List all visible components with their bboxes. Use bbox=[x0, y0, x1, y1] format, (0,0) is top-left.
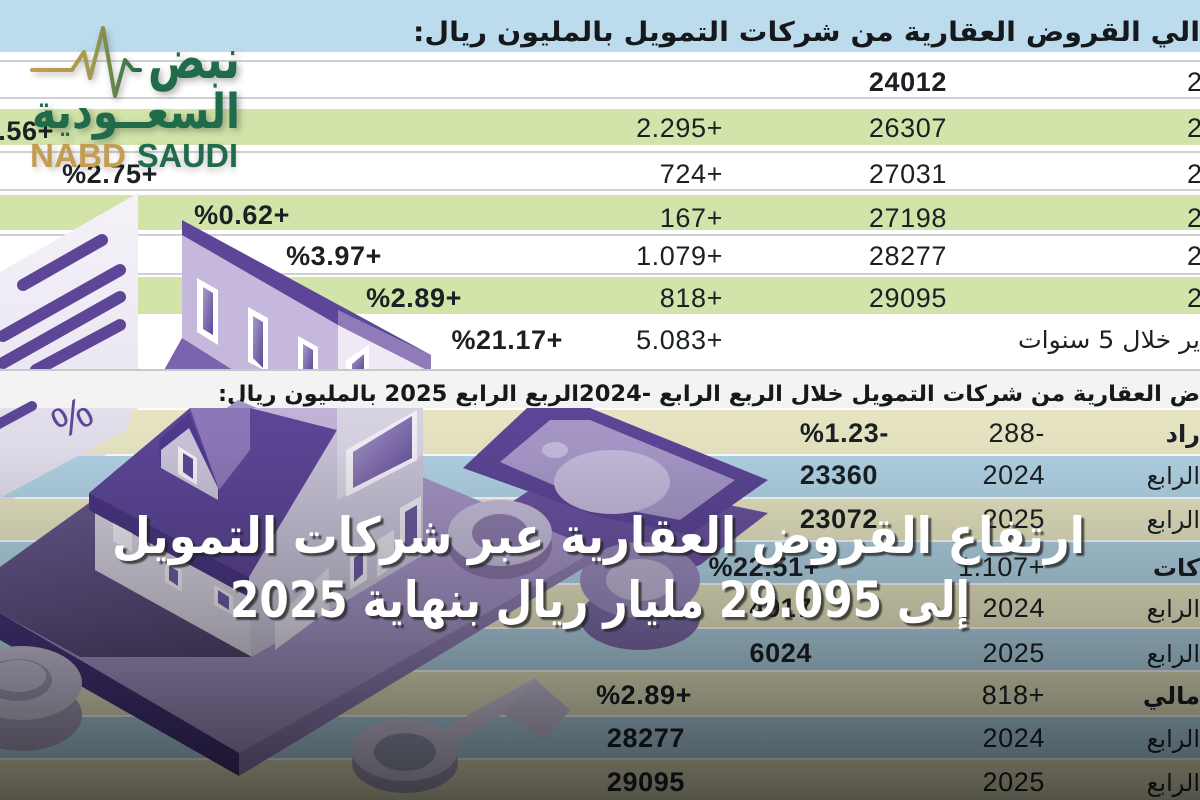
top table values: 2.295+ bbox=[636, 113, 723, 143]
second table values: 2024 bbox=[983, 723, 1045, 753]
second table values: مالي bbox=[1143, 682, 1200, 710]
second table values: 288- bbox=[989, 418, 1045, 448]
top table values: 29095 bbox=[869, 283, 947, 313]
illustration: coin ring bbox=[448, 500, 552, 579]
top table values: ير خلال 5 سنوات bbox=[1018, 326, 1200, 354]
illustration: ground plate bbox=[0, 400, 597, 776]
top table values: 818+ bbox=[660, 283, 723, 313]
title shadow: ارتفاع القروض العقارية عبر شركات التمويل bbox=[115, 510, 1088, 569]
title shadow bbox=[115, 510, 1088, 633]
top table values: 167+ bbox=[660, 203, 723, 233]
house left wall bbox=[95, 513, 252, 657]
second table values: 1.107+ bbox=[958, 552, 1045, 582]
top table values: %0.62+ bbox=[194, 200, 290, 230]
top table heading band bbox=[0, 0, 1200, 52]
top table values: %2.89+ bbox=[366, 283, 462, 313]
illustration: coin stack right bbox=[580, 542, 700, 650]
second table heading: ض العقارية من شركات التمويل خلال الربع الرابع -2024الربع الرابع 2025 بالمليون ريال: bbox=[218, 382, 1200, 407]
second table values: الرابع bbox=[1147, 595, 1200, 623]
second table values: الرابع bbox=[1147, 506, 1200, 534]
logo shadow: نبض bbox=[151, 30, 243, 95]
second table values: الرابع bbox=[1147, 640, 1200, 668]
illustration: house bbox=[89, 408, 423, 657]
logo shadow: السعــودية bbox=[35, 87, 243, 143]
second table values: %2.89+ bbox=[596, 680, 692, 710]
second table values: 29095 bbox=[607, 767, 685, 797]
logo heartbeat line bbox=[32, 28, 140, 96]
top table values: %3.97+ bbox=[286, 241, 382, 271]
top table values: %21.17+ bbox=[451, 325, 563, 355]
second table values: 2025 bbox=[983, 638, 1045, 668]
top table values: 27198 bbox=[869, 203, 947, 233]
illustration: upper building bbox=[163, 220, 431, 372]
illustration: coin stack left bbox=[0, 646, 82, 751]
second table values: الرابع bbox=[1147, 769, 1200, 797]
panel: top table bbox=[0, 0, 1200, 314]
second table values: الرابع bbox=[1147, 725, 1200, 753]
illustration: document paper bbox=[0, 193, 138, 505]
second table values: 23360 bbox=[800, 460, 878, 490]
second table values: 4917 bbox=[750, 593, 812, 623]
logo: Nabd Saudi: SAUDI bbox=[137, 137, 238, 174]
second table values: راد bbox=[1166, 420, 1200, 448]
main title bbox=[112, 507, 1088, 633]
second table values: 2025 bbox=[983, 767, 1045, 797]
logo shadow bbox=[33, 30, 243, 177]
title shadow: إلى 29.095 مليار ريال بنهاية 2025 bbox=[233, 574, 973, 633]
top table values: 24012 bbox=[869, 67, 947, 97]
dark gradient overlay bbox=[0, 400, 1200, 800]
title line one: ارتفاع القروض العقارية عبر شركات التمويل bbox=[112, 507, 1085, 566]
second table values bbox=[596, 418, 1200, 797]
second table values: 818+ bbox=[982, 680, 1045, 710]
logo Latin name: NABD bbox=[30, 137, 126, 174]
logo Arabic name: نبض bbox=[148, 27, 240, 92]
second table values: %1.23- bbox=[800, 418, 889, 448]
second table values: 6024 bbox=[750, 638, 812, 668]
house right wall bbox=[249, 408, 423, 657]
second table values: 2024 bbox=[983, 460, 1045, 490]
house windows and garage bbox=[113, 496, 421, 650]
illustration: lower paper bbox=[0, 387, 134, 498]
second table stripes bbox=[0, 410, 1200, 800]
logo shadow: NABD SAUDI bbox=[33, 140, 238, 177]
illustration: lower paper: % bbox=[44, 387, 101, 449]
second table values: الرابع bbox=[1147, 462, 1200, 490]
top table values: %2.75+ bbox=[62, 159, 158, 189]
top table values: 26307 bbox=[869, 113, 947, 143]
logo: Nabd Saudi bbox=[30, 27, 243, 177]
second table values: كات bbox=[1153, 554, 1200, 582]
dormer bbox=[159, 413, 219, 500]
illustration: money notes bbox=[463, 408, 768, 585]
title line two: إلى 29.095 مليار ريال بنهاية 2025 bbox=[230, 571, 970, 630]
illustration: key bbox=[352, 678, 570, 793]
second table values: 2024 bbox=[983, 593, 1045, 623]
top table values: 1.079+ bbox=[636, 241, 723, 271]
top table values: 724+ bbox=[660, 159, 723, 189]
second table values: 23072 bbox=[800, 504, 878, 534]
top table values bbox=[0, 67, 1200, 355]
second table values: 2025 bbox=[983, 504, 1045, 534]
panel: second table bbox=[0, 369, 1200, 800]
top table values: 28277 bbox=[869, 241, 947, 271]
second table values: %22.51+ bbox=[708, 552, 820, 582]
second table heading band bbox=[0, 370, 1200, 408]
upper window bbox=[346, 410, 417, 497]
roof bbox=[250, 408, 337, 430]
top table values: 27031 bbox=[869, 159, 947, 189]
second table values: 28277 bbox=[607, 723, 685, 753]
top table values: 5.083+ bbox=[636, 325, 723, 355]
logo: Nabd Saudi: السعــودية bbox=[32, 84, 240, 140]
top table heading: الي القروض العقارية من شركات التمويل بالمليون ريال: bbox=[413, 17, 1200, 48]
